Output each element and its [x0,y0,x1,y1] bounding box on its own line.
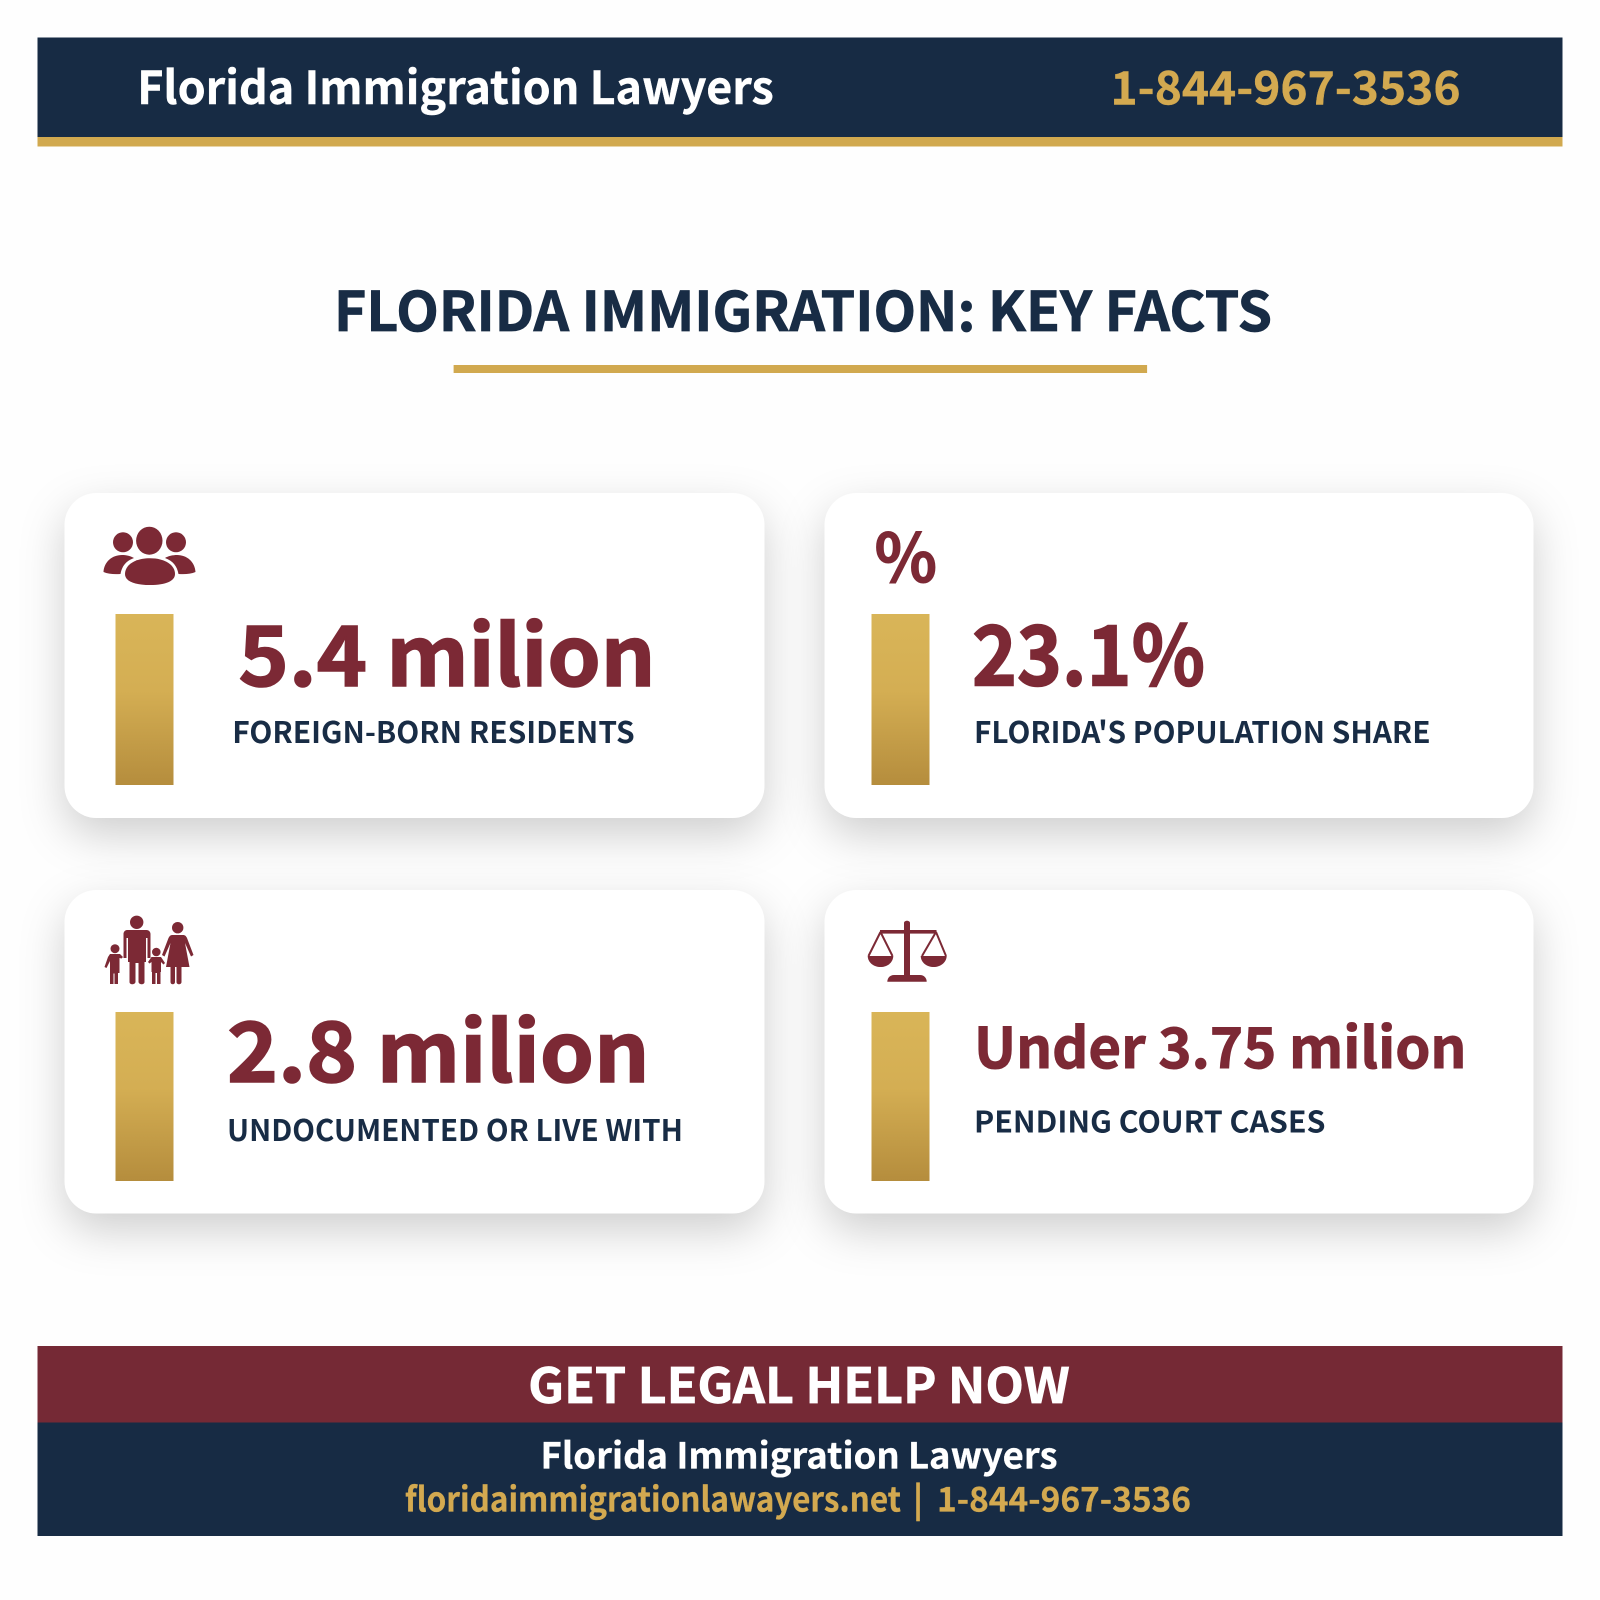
statistic label: FLORIDA'S POPULATION SHARE [974,708,1430,752]
footer call to action [38,1346,1562,1422]
statistic label: PENDING COURT CASES [974,1098,1326,1142]
icon: percent sign: % [874,505,937,602]
title underline [454,365,1147,373]
title: FLORIDA IMMIGRATION: KEY FACTS [334,268,1272,347]
statistic label: FOREIGN-BORN RESIDENTS [232,708,635,752]
accent bar [116,614,174,785]
header firm name: Florida Immigration Lawyers [137,52,774,118]
footer website and phone: 1-844-967-3536 [937,1472,1191,1522]
accent bar [872,1012,930,1181]
statistic value: 2.8 milion [227,986,650,1106]
header phone number: 1-844-967-3536 [1110,52,1460,118]
icon: family [104,916,194,984]
icon: scales of justice [868,921,947,982]
call to action heading: GET LEGAL HELP NOW [528,1347,1070,1417]
statistic value: 23.1% [972,590,1205,710]
footer website and phone [405,1472,1191,1522]
icon: group of people [104,527,196,585]
panel: pending court cases [824,890,1534,1214]
panel: foreign-born residents [64,493,764,818]
footer website and phone: | [913,1472,923,1522]
footer firm name: Florida Immigration Lawyers [540,1428,1058,1480]
accent bar [116,1012,174,1181]
statistic label: UNDOCUMENTED OR LIVE WITH [227,1106,683,1150]
accent bar [872,614,930,785]
header banner [38,38,1562,146]
statistic value: 5.4 milion [238,590,656,710]
panel: undocumented [64,890,764,1214]
panel: population share [824,493,1534,818]
statistic value: Under 3.75 milion [974,1004,1466,1085]
footer website and phone: floridaimmigrationlawayers.net [405,1472,901,1522]
footer contact block [38,1422,1562,1536]
